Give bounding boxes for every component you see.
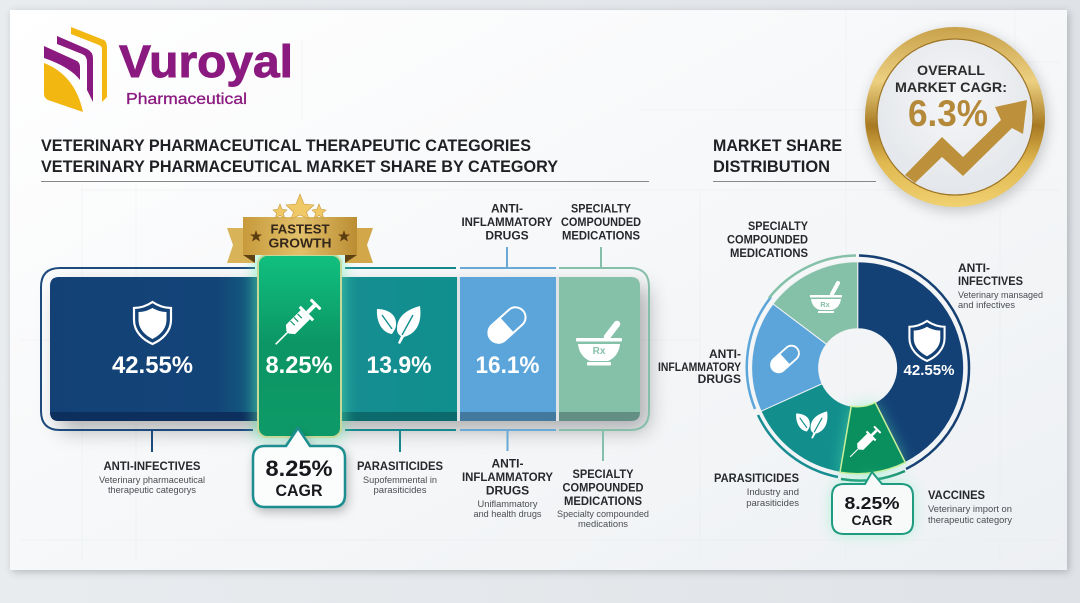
donut label: anti-infectives bbox=[958, 261, 1043, 311]
slice: anti-inflammatory drugs bbox=[752, 304, 826, 411]
label: parasiticides: PARASITICIDES bbox=[357, 459, 443, 473]
top label: specialty compounded medications bbox=[561, 202, 641, 268]
segment: anti-inflammatory drugs bbox=[460, 277, 556, 421]
icon: shield bbox=[909, 321, 945, 361]
label: specialty compounded medications bbox=[557, 431, 649, 530]
label: parasiticides bbox=[357, 431, 443, 496]
label: anti-infectives: therapeutic categorys bbox=[108, 485, 196, 496]
donut label: vaccines: therapeutic category bbox=[928, 515, 1012, 526]
badge: overall market CAGR: 6.3% bbox=[908, 93, 988, 134]
main heading bbox=[41, 136, 649, 182]
donut label: anti-inflammatory drugs: ANTI- bbox=[709, 347, 741, 361]
badge growth arrow bbox=[905, 100, 1027, 183]
badge text: OVERALL bbox=[917, 62, 985, 78]
label: specialty compounded medications: SPECIALTY bbox=[572, 467, 634, 481]
icon: mortar bbox=[810, 283, 842, 313]
callout: 8.25% CAGR on bar: CAGR bbox=[276, 481, 322, 500]
side heading: market share distribution bbox=[713, 136, 876, 182]
slice: vaccines bbox=[840, 402, 905, 474]
callout: 8.25% CAGR on bar: 8.25% bbox=[266, 456, 332, 481]
label: anti-inflammatory drugs bbox=[462, 431, 553, 520]
outer ring segments bbox=[747, 256, 969, 481]
icon: shield bbox=[134, 302, 171, 344]
donut label: anti-infectives: Veterinary mansaged bbox=[958, 290, 1043, 301]
donut label: vaccines: Veterinary import on bbox=[928, 504, 1012, 515]
donut label: specialty compounded medications bbox=[727, 219, 808, 260]
stars bbox=[273, 194, 326, 219]
donut label: vaccines bbox=[928, 488, 1012, 526]
label: parasiticides: Supofemmental in bbox=[363, 475, 437, 486]
label: specialty compounded medications: COMPOUNDED bbox=[562, 480, 644, 494]
ribbon bbox=[243, 217, 357, 255]
value: 16.1% bbox=[476, 352, 540, 379]
donut label: specialty compounded medications: COMPOUNDED bbox=[727, 232, 808, 246]
segment: vaccines highlighted bbox=[254, 250, 344, 440]
banner: fastest growth: GROWTH bbox=[268, 236, 332, 250]
value: 42.55%: 42.55% bbox=[904, 363, 955, 379]
ribbon tails bbox=[227, 228, 254, 263]
icon: syringe bbox=[846, 424, 883, 461]
donut label: anti-inflammatory drugs: DRUGS bbox=[698, 372, 741, 386]
label: anti-infectives: Veterinary pharmaceutical bbox=[99, 475, 205, 486]
donut label: parasiticides bbox=[714, 471, 799, 509]
main heading: VETERINARY PHARMACEUTICAL MARKET SHARE BY CATEGORY bbox=[41, 157, 559, 176]
side heading: market share distribution: MARKET SHARE bbox=[713, 136, 842, 155]
badge: overall market CAGR: MARKET CAGR: bbox=[895, 79, 1007, 95]
label: anti-infectives bbox=[99, 431, 205, 496]
callout: 8.25% CAGR on donut bbox=[832, 472, 913, 534]
label: anti-inflammatory drugs: and health drugs bbox=[474, 509, 542, 520]
label: anti-inflammatory drugs: INFLAMMATORY bbox=[462, 470, 553, 484]
top label: specialty compounded medications: SPECIALTY bbox=[571, 202, 631, 216]
label: anti-inflammatory drugs: Uniflammatory bbox=[478, 499, 538, 510]
donut label: specialty compounded medications: MEDICATIONS bbox=[730, 246, 808, 260]
segment: anti-infectives bbox=[50, 277, 258, 421]
side heading: market share distribution: DISTRIBUTION bbox=[713, 157, 830, 176]
segment: parasiticides bbox=[341, 277, 457, 421]
label: specialty compounded medications: Specialty compounded bbox=[557, 509, 649, 520]
icon: capsule bbox=[767, 342, 803, 376]
value: 13.9% bbox=[366, 352, 432, 379]
icon: mortar: Rx bbox=[820, 300, 831, 309]
label: anti-inflammatory drugs: DRUGS bbox=[486, 484, 529, 498]
slice: specialty compounded medications bbox=[773, 262, 858, 344]
donut label: parasiticides: Industry and bbox=[747, 487, 799, 498]
donut label: parasiticides: PARASITICIDES bbox=[714, 471, 799, 485]
icon: leaf bbox=[796, 411, 827, 439]
icon: syringe bbox=[269, 297, 323, 351]
icon: capsule bbox=[483, 302, 530, 348]
bar chart: market share by category bbox=[41, 250, 649, 440]
slice: parasiticides bbox=[761, 384, 851, 472]
segment: specialty compounded medications bbox=[559, 277, 640, 421]
donut chart: market share distribution bbox=[747, 256, 969, 481]
label: parasiticides: parasiticides bbox=[374, 485, 427, 496]
banner text: FASTEST bbox=[270, 222, 330, 236]
banner: fastest growth bbox=[227, 194, 373, 263]
callout: 8.25% CAGR on donut: 8.25% bbox=[844, 493, 900, 513]
top label: anti-inflammatory drugs: ANTI- bbox=[491, 202, 523, 216]
callout: 8.25% CAGR on donut: CAGR bbox=[852, 512, 892, 528]
donut label: anti-infectives: ANTI- bbox=[958, 261, 990, 275]
top label: anti-inflammatory drugs bbox=[462, 202, 552, 268]
badge: overall market CAGR bbox=[865, 27, 1047, 211]
icon: mortar and pestle bbox=[576, 324, 622, 366]
icon: leaf bbox=[377, 306, 420, 344]
value: 8.25% bbox=[266, 352, 332, 379]
donut label: anti-inflammatory drugs: INFLAMMATORY bbox=[658, 360, 741, 374]
donut label: anti-infectives: and infectives bbox=[958, 300, 1015, 311]
top label: specialty compounded medications: MEDICATIONS bbox=[562, 228, 640, 242]
donut label: vaccines: VACCINES bbox=[928, 488, 985, 502]
logo bbox=[44, 27, 293, 112]
top label: anti-inflammatory drugs: DRUGS bbox=[485, 228, 529, 242]
donut label: anti-inflammatory drugs bbox=[658, 347, 741, 386]
top label: anti-inflammatory drugs: INFLAMMATORY bbox=[462, 215, 552, 229]
icon: mortar and pestle: Rx bbox=[593, 346, 606, 357]
callout: 8.25% CAGR on bar bbox=[253, 428, 345, 507]
donut label: anti-infectives: INFECTIVES bbox=[958, 274, 1023, 288]
label: specialty compounded medications: medications bbox=[578, 519, 628, 530]
top label: specialty compounded medications: COMPOUNDED bbox=[561, 215, 641, 229]
logo wordmark: Vuroyal bbox=[119, 36, 293, 87]
label: anti-infectives: ANTI-INFECTIVES bbox=[104, 459, 200, 473]
slice: anti-infectives bbox=[858, 262, 964, 462]
logo mark bbox=[44, 27, 107, 112]
donut label: parasiticides: parasiticides bbox=[746, 498, 799, 509]
label: anti-inflammatory drugs: ANTI- bbox=[492, 456, 524, 470]
label: specialty compounded medications: MEDICATIONS bbox=[564, 494, 642, 508]
main heading: VETERINARY PHARMACEUTICAL THERAPEUTIC CATEGORIES bbox=[41, 136, 531, 155]
value: 42.55% bbox=[112, 352, 193, 379]
bar outline bbox=[41, 268, 255, 430]
donut label: specialty compounded medications: SPECIALTY bbox=[748, 219, 808, 233]
logo subtitle: Pharmaceutical bbox=[126, 91, 247, 108]
